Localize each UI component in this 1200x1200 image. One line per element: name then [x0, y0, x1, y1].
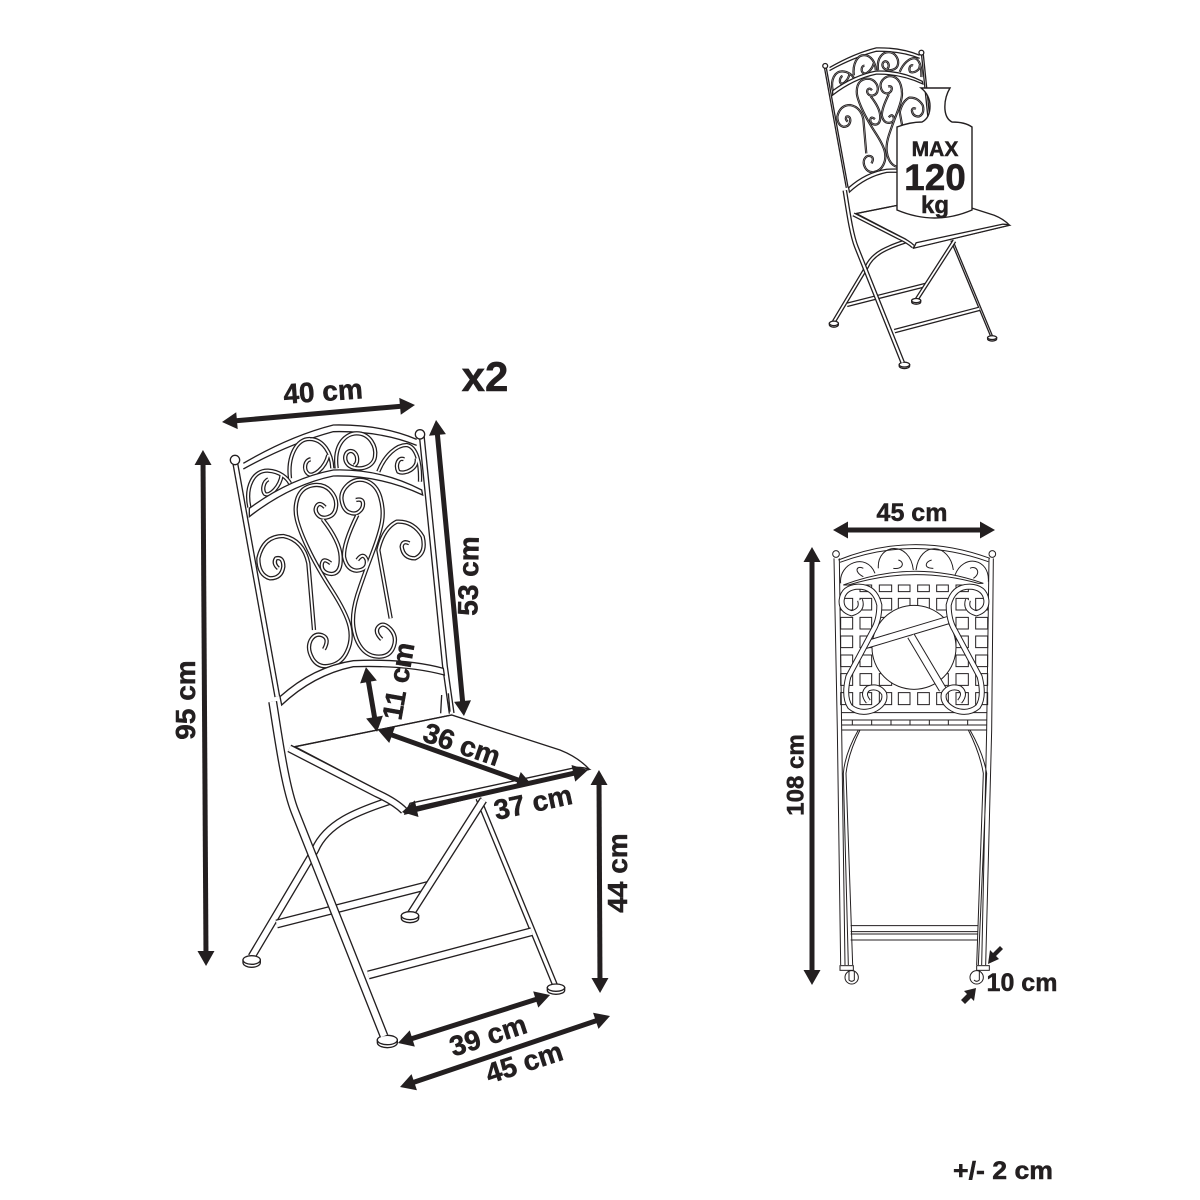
max load text — [904, 138, 966, 219]
label 45 cm: 45 cm — [482, 1035, 567, 1089]
max load text: MAX — [912, 138, 958, 161]
arrow: folded width 45 cm — [841, 528, 987, 532]
arrow: foot span 39 cm — [406, 997, 542, 1041]
dimension arrows — [203, 406, 1003, 1084]
max load text: 120 — [904, 157, 966, 198]
arrow: folded height 108 cm — [810, 555, 814, 977]
seat lattice — [841, 585, 988, 730]
label x2: x2 — [462, 353, 508, 400]
label 36 cm: 36 cm — [419, 717, 504, 772]
arrow: back height 53 cm — [437, 428, 463, 708]
load weight jug — [897, 88, 972, 218]
small chair with max load weight — [823, 48, 1009, 369]
round opening and cross bars — [872, 605, 956, 689]
folded legs — [834, 558, 993, 965]
tolerance note: +/- 2 cm — [953, 1157, 1053, 1185]
arrow: overall width 45 cm — [408, 1019, 602, 1084]
lattice scrolls — [842, 587, 986, 712]
arrow: seat back width 40 cm — [230, 406, 407, 421]
label 11 cm: 11 cm — [376, 640, 421, 722]
label 40 cm: 40 cm — [282, 373, 364, 410]
label 39 cm: 39 cm — [446, 1008, 531, 1062]
main chair: side perspective view — [230, 425, 589, 1048]
label 10 cm: 10 cm — [987, 969, 1057, 997]
arrow: total height 95 cm — [203, 458, 206, 958]
label 108 cm: 108 cm — [782, 734, 810, 816]
chair back with scrollwork — [230, 425, 452, 713]
crest and knobs — [833, 545, 996, 585]
front view: folded chair — [833, 545, 996, 984]
casters — [840, 966, 989, 984]
arrow: folded depth upper — [988, 946, 1003, 964]
label 37 cm: 37 cm — [491, 779, 575, 826]
label 95 cm: 95 cm — [170, 660, 201, 740]
label 53 cm: 53 cm — [452, 536, 485, 616]
arrow: seat height 44 cm — [599, 778, 600, 985]
max load text: kg — [921, 192, 949, 219]
arrow: seat depth 36 cm — [386, 733, 524, 782]
label 44 cm: 44 cm — [602, 833, 633, 913]
dimension labels — [170, 353, 1057, 1185]
seat and folding legs — [243, 702, 589, 1048]
small chair view — [823, 48, 1009, 369]
arrow: armrest gap 11 cm — [367, 675, 376, 724]
label folded 45 cm: 45 cm — [877, 499, 947, 527]
arrow: seat width 37 cm — [410, 772, 580, 810]
arrow: folded depth lower — [961, 988, 976, 1004]
